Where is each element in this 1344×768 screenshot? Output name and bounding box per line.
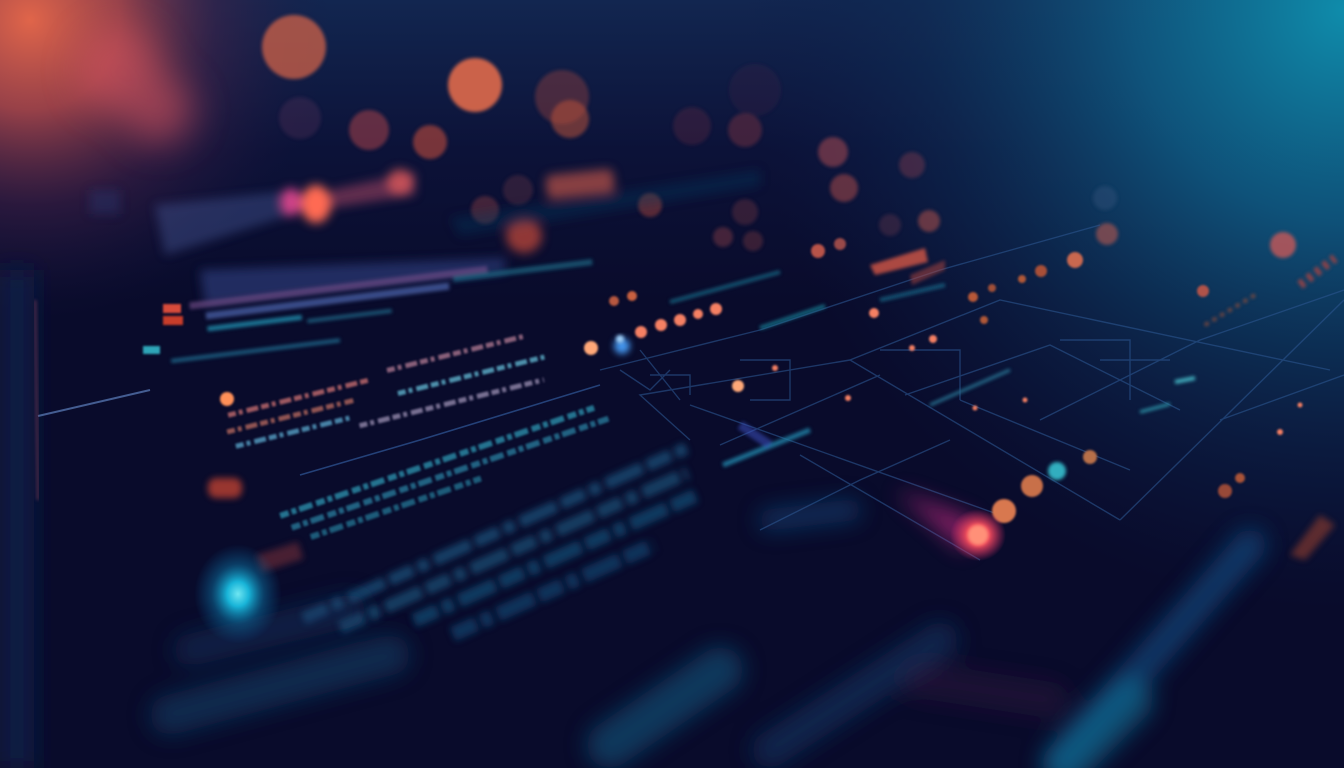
blurred code rows: lower bbox=[256, 448, 718, 687]
code text rows: middle bbox=[35, 253, 613, 544]
blurred foreground bars bbox=[170, 510, 1250, 765]
circuit diagram lines bbox=[600, 225, 1344, 560]
bokeh lights: upper area bbox=[78, 15, 1296, 258]
orange glowing nodes bbox=[584, 238, 1335, 560]
pink comet glow bbox=[895, 490, 1006, 561]
blurred code rows: top bbox=[90, 169, 760, 305]
teal dashes on circuit bbox=[670, 272, 1195, 465]
cyan glow bbox=[194, 544, 282, 644]
